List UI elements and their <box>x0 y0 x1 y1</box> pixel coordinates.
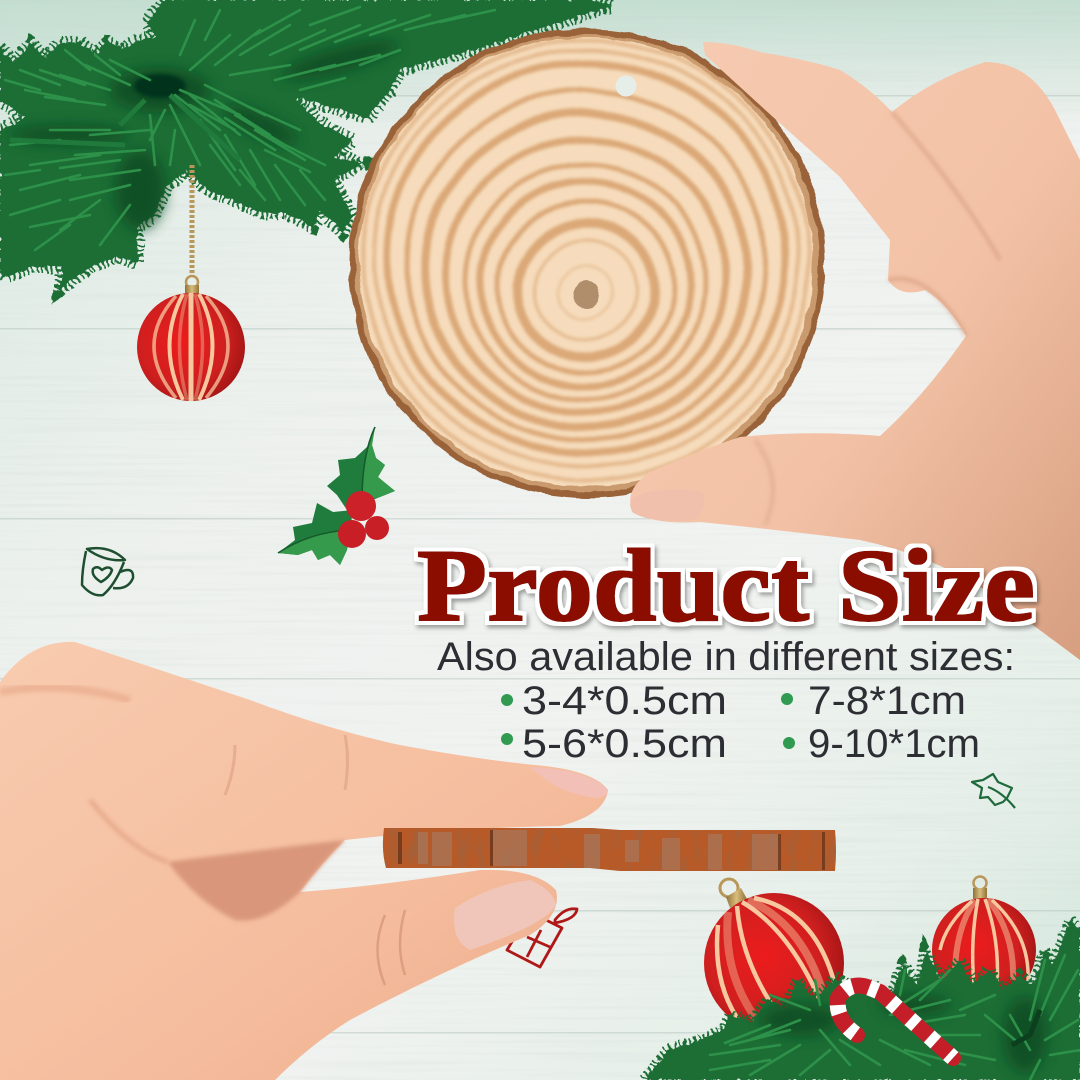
thumbnail: top hand <box>630 490 705 521</box>
hand: bottom left holding slab <box>0 642 608 1080</box>
holly leaf: lower <box>278 503 353 565</box>
bark patches <box>418 830 780 870</box>
pine branch: bottom right <box>645 920 1080 1080</box>
size: 7-8*1cm: 7-8*1cm <box>808 679 966 723</box>
icon: holly leaf outline <box>972 774 1015 808</box>
wood slice hanging hole <box>616 76 636 96</box>
dark sprig stem <box>1012 1010 1040 1045</box>
candy cane <box>838 986 953 1058</box>
title: Product Size <box>417 529 1035 643</box>
size: 5-6*0.5cm: 5-6*0.5cm <box>522 722 727 766</box>
ornament: bottom right <box>932 876 1036 1002</box>
wood slice face <box>349 28 825 498</box>
size: 3-4*0.5cm: 3-4*0.5cm <box>522 679 727 723</box>
ornament: bottom center <box>704 879 844 1033</box>
size: 9-10*1cm: 9-10*1cm <box>808 722 980 766</box>
icon: gift box outline <box>507 909 577 967</box>
fingernail: index finger <box>530 767 608 798</box>
branch shadows <box>10 33 401 230</box>
holly leaf: upper <box>327 427 395 510</box>
thumbnail: lower thumb <box>454 880 556 950</box>
shadow between index finger and thumb <box>168 840 345 921</box>
size list <box>501 679 980 766</box>
subtitle: Also available in different sizes: <box>437 635 1015 679</box>
chain and ornament: top left <box>137 165 245 401</box>
growth rings <box>363 40 809 480</box>
icon: coffee mug outline <box>82 548 133 595</box>
wood slab side view <box>382 826 837 873</box>
branch shadows <box>760 995 1047 1073</box>
holly with berries <box>278 427 395 565</box>
needles <box>710 955 1080 1080</box>
hand: top right holding slice <box>630 42 1080 660</box>
thick foreground sprigs <box>10 95 240 160</box>
pine branch: top left <box>0 0 612 290</box>
needles <box>5 7 495 250</box>
